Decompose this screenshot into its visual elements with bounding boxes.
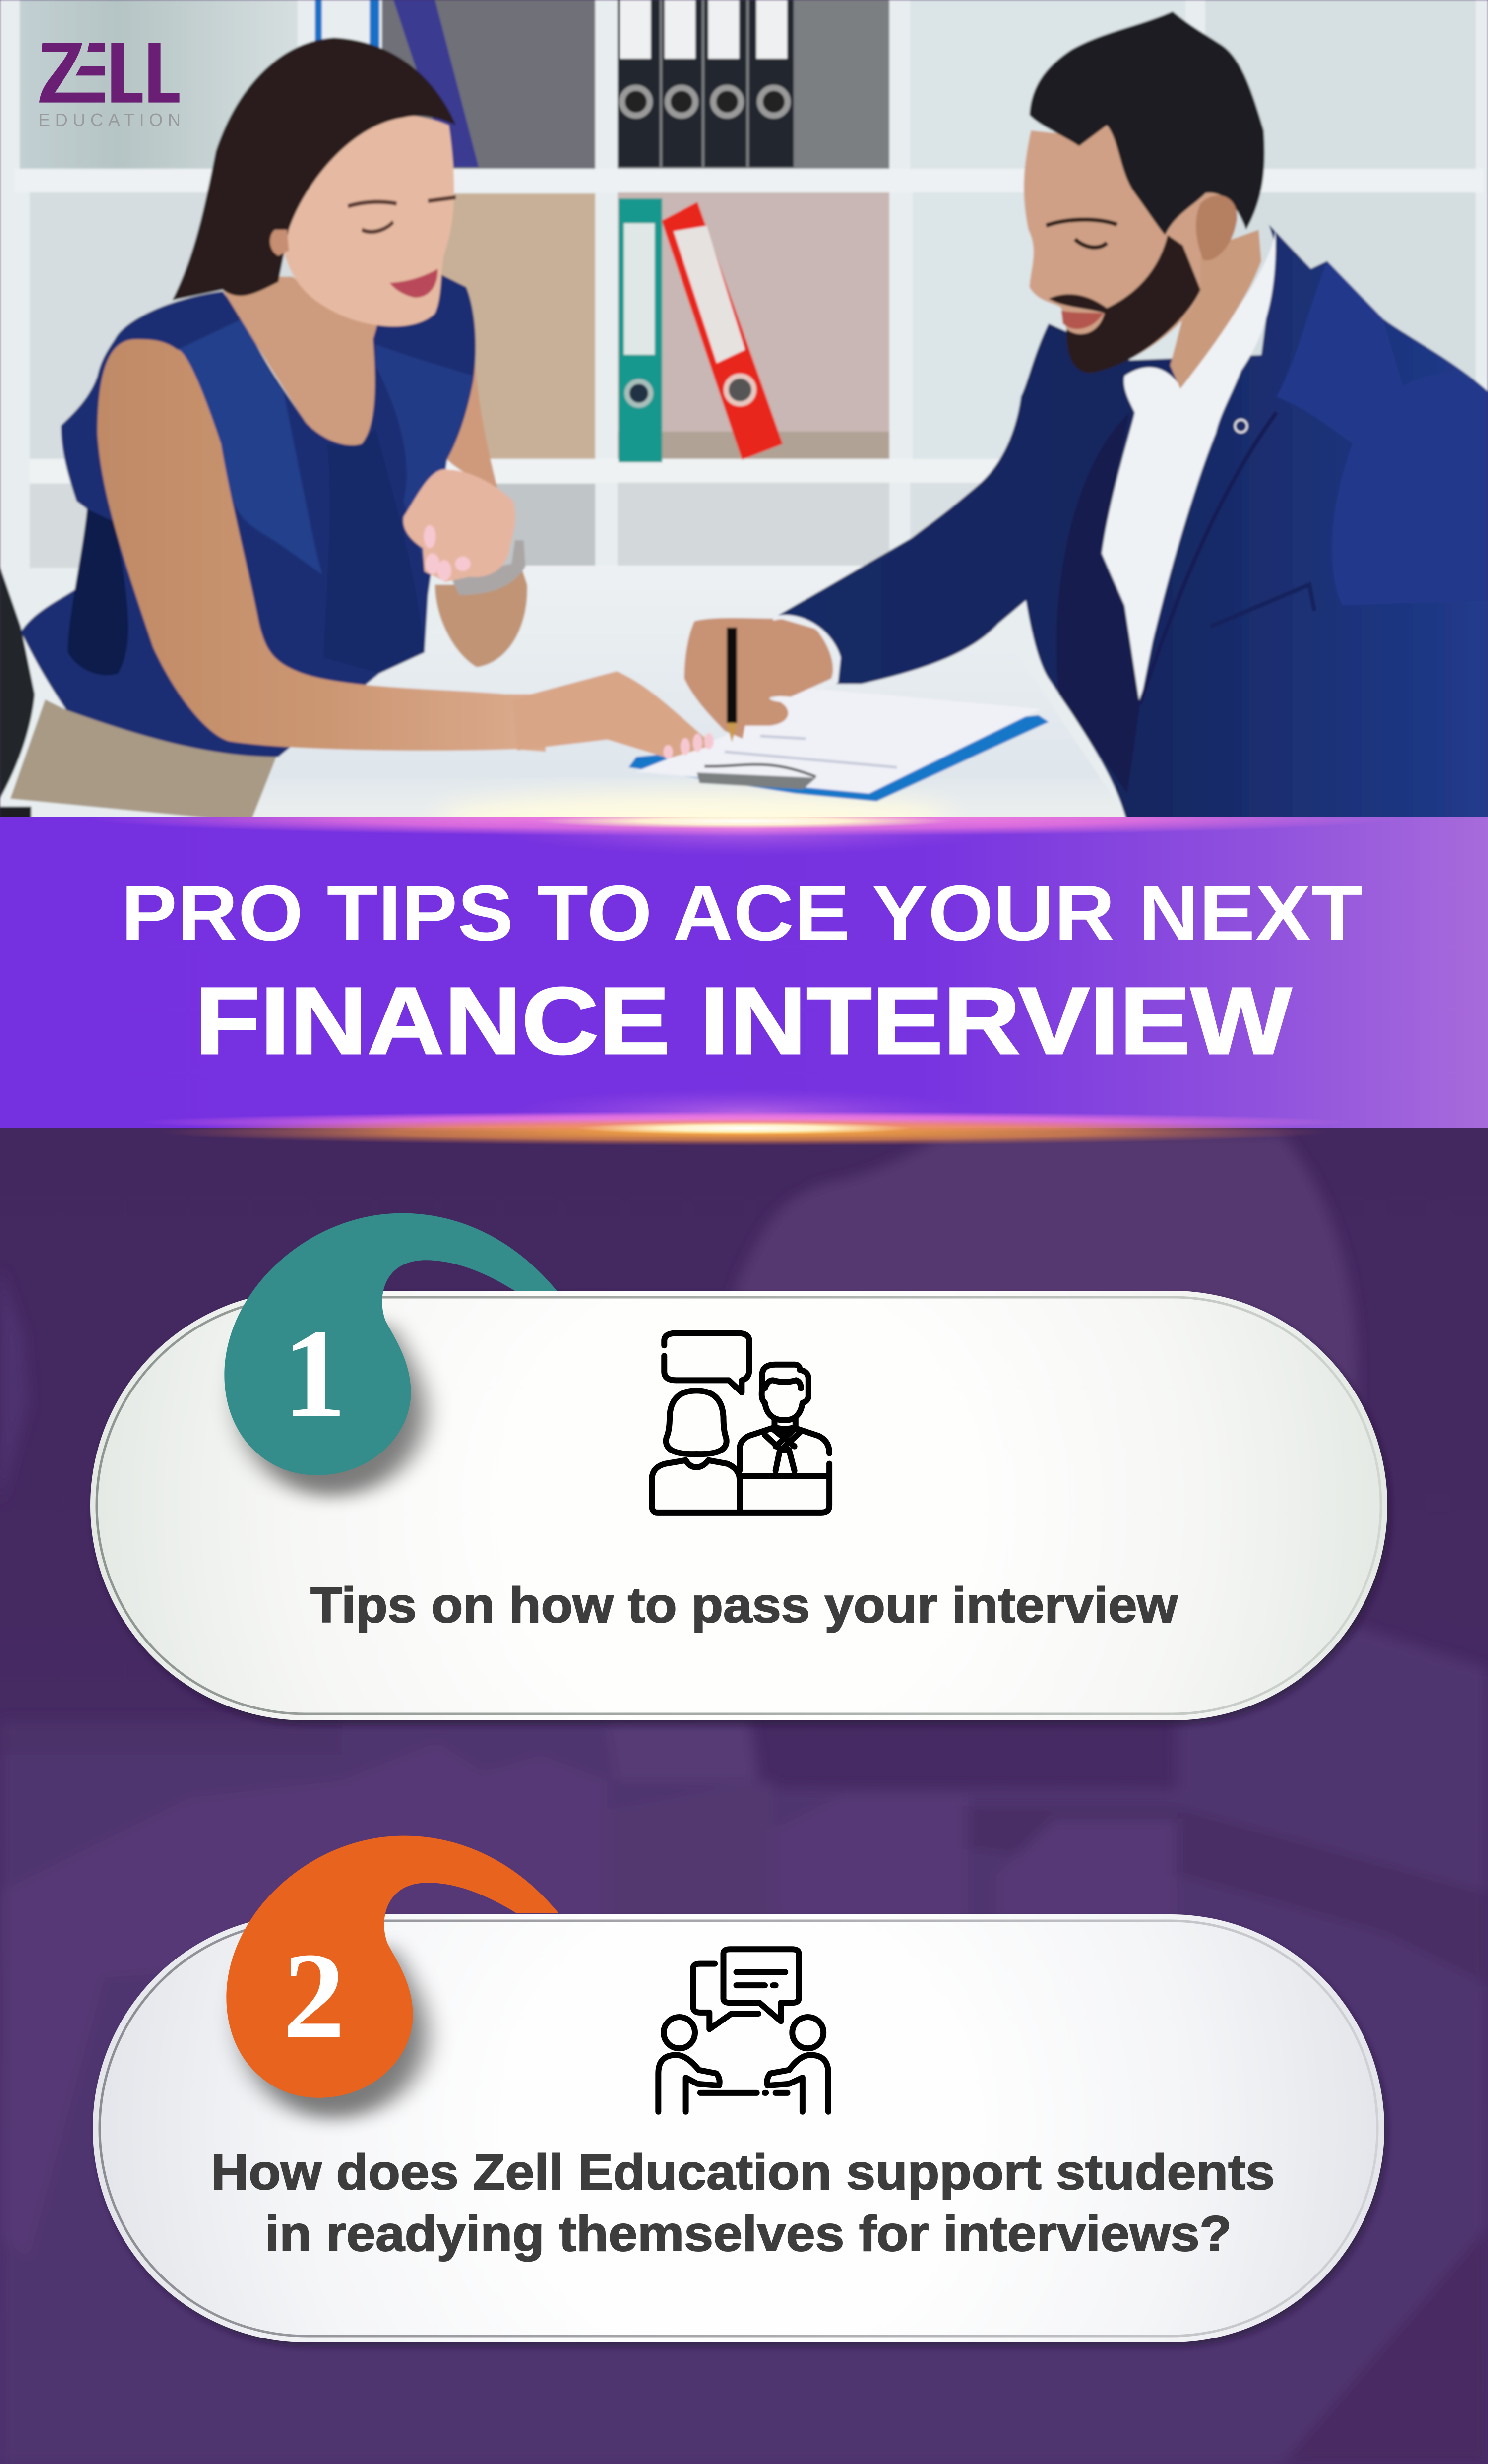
panel: tip 1 [90, 1213, 1387, 1720]
chair [0, 567, 35, 799]
tip 1 heading: Tips on how to pass your interview [310, 1578, 1178, 1633]
ear [1196, 195, 1237, 260]
icon: two people talking at a table [658, 1949, 828, 2112]
title line 2: FINANCE INTERVIEW [195, 967, 1292, 1074]
icon: woman and man interview [652, 1333, 829, 1513]
tip 2 heading: in readying themselves for interviews? [265, 2206, 1232, 2262]
woman [0, 38, 546, 822]
title banner [0, 801, 1488, 1146]
shirt [1102, 227, 1276, 705]
panel: tip 2 [93, 1836, 1384, 2342]
face [281, 115, 454, 326]
woman's hand on paper [512, 671, 714, 759]
skirt [10, 699, 278, 822]
inner jacket shadow [1056, 412, 1140, 793]
bookshelf [15, 0, 1483, 568]
lower section background with ghosted photo [0, 1121, 1488, 2464]
top glow [89, 801, 1399, 856]
number badge 1 [224, 1213, 557, 1475]
number badge 2 shadow [240, 1945, 427, 2119]
hair [172, 38, 456, 300]
logo: Zell Education [38, 43, 181, 130]
jacket [768, 224, 1488, 822]
lapel pin [1235, 420, 1247, 432]
card 2 pill [93, 1914, 1384, 2342]
number badge 2: 2 [283, 1927, 345, 2065]
neck and chest [223, 277, 377, 445]
neck [1170, 230, 1261, 389]
number badge 1: 1 [283, 1303, 346, 1444]
desk [250, 566, 1131, 823]
number badge 1 shadow [238, 1323, 425, 1496]
raised hand [403, 469, 515, 582]
face [1024, 115, 1236, 373]
draped arm [97, 339, 546, 752]
bottom glow [139, 1089, 1349, 1146]
beard [1049, 235, 1200, 373]
logo: Zell Education: EDUCATION [38, 110, 181, 130]
writing hand [684, 618, 833, 739]
man [628, 11, 1488, 822]
right forearm [435, 569, 527, 667]
pen [727, 628, 737, 723]
hair [1030, 11, 1265, 235]
hero photo: two people at a desk [0, 0, 1488, 843]
card 1 pill [90, 1291, 1387, 1720]
clipboard [628, 715, 1049, 801]
tip 2 heading: How does Zell Education support students [211, 2145, 1275, 2200]
tip 2 heading [211, 2145, 1275, 2262]
blouse [21, 274, 476, 757]
title line 1: PRO TIPS TO ACE YOUR NEXT [121, 870, 1363, 957]
binders [315, 0, 794, 462]
number badge 2 [226, 1836, 558, 2098]
watch [450, 540, 525, 595]
